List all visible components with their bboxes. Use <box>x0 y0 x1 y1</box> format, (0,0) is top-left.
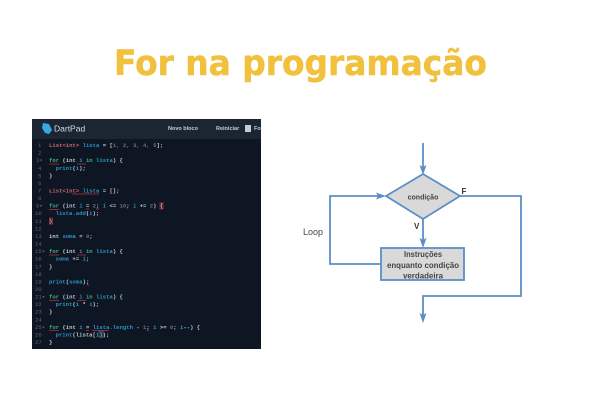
DartPad header bar: Reiniciar <box>216 126 240 132</box>
code text: for (int i in lista) { <box>49 157 123 164</box>
arrow: true branch <box>420 219 426 248</box>
code text: for (int i = lista.length - 1; i >= 0; i--) { <box>49 324 200 331</box>
flowchart <box>303 143 521 323</box>
decision label: condição <box>408 194 438 202</box>
icon: Dart logo <box>42 123 52 134</box>
instructions text: enquanto condição <box>387 261 459 270</box>
code text: for (int i in lista) { <box>49 248 123 255</box>
instructions text: Instruções <box>404 250 443 259</box>
line numbers: 17 <box>35 263 42 270</box>
code text: print(lista[i]); <box>56 332 109 338</box>
code text: } <box>49 263 52 270</box>
line numbers: 23 <box>35 309 42 316</box>
line numbers: 21▾ <box>35 294 45 301</box>
DartPad name: DartPad <box>54 124 85 134</box>
line numbers: 19 <box>35 278 42 285</box>
line numbers: 7 <box>38 188 41 194</box>
arrow: entry <box>420 143 426 175</box>
line numbers: 16 <box>35 256 42 263</box>
line numbers: 25▾ <box>35 324 45 331</box>
instructions text: verdadeira <box>403 272 444 280</box>
label: V: V <box>414 222 420 231</box>
code text: lista.add(i); <box>56 210 99 217</box>
line numbers: 13 <box>35 233 42 240</box>
code text: int soma = 0; <box>49 233 93 240</box>
label: Loop: Loop <box>303 227 323 237</box>
header menu: Novo bloco <box>168 126 199 132</box>
line numbers: 18 <box>35 271 42 278</box>
line numbers: 12 <box>35 225 42 232</box>
line numbers: 15▾ <box>35 248 45 255</box>
label: F: F <box>462 187 466 196</box>
code text: for (int i = 2; i <= 10; i += 2) { <box>49 203 163 210</box>
code text: List<int> lista = []; <box>49 188 120 194</box>
line numbers: 26 <box>35 332 42 338</box>
DartPad header bar: Fo <box>254 126 261 132</box>
line numbers: 3▾ <box>36 157 43 164</box>
code text: for (int i in lista) { <box>49 294 123 301</box>
line numbers: 22 <box>35 301 42 308</box>
instructions text <box>387 250 459 280</box>
line numbers: 6 <box>38 180 41 187</box>
panel: DartPad code editor screenshot <box>32 119 261 349</box>
code text: print(soma); <box>49 278 89 285</box>
arrow: false exit <box>420 196 521 323</box>
line numbers: 8 <box>38 195 41 202</box>
code text: print(i); <box>56 165 86 172</box>
code text: List<int> lista = [1, 2, 3, 4, 5]; <box>49 142 163 149</box>
line numbers: 4 <box>38 165 42 172</box>
title: For na programação <box>114 44 487 84</box>
line numbers: 1 <box>38 142 42 149</box>
decision diamond <box>386 174 460 219</box>
line numbers: 27 <box>35 339 42 346</box>
error underlines <box>49 164 163 337</box>
code text: } <box>49 172 52 179</box>
code text: print(i * i); <box>56 301 99 308</box>
line numbers: 2 <box>38 150 41 157</box>
code text: } <box>49 309 52 316</box>
DartPad header bar <box>32 119 261 139</box>
code text: } <box>49 339 52 346</box>
code text: soma += i; <box>56 256 89 263</box>
line numbers: 20 <box>35 286 42 293</box>
line numbers: 11 <box>35 218 42 225</box>
line numbers: 9▾ <box>36 203 43 210</box>
arrow: loop back <box>330 192 386 264</box>
line numbers: 24 <box>35 316 42 323</box>
code text: } <box>49 218 52 225</box>
code text <box>49 142 200 346</box>
line numbers: 5 <box>38 172 41 179</box>
line numbers: 14 <box>35 240 42 248</box>
line numbers: 10 <box>35 210 42 217</box>
instructions box <box>381 248 464 280</box>
line numbers <box>35 142 45 346</box>
